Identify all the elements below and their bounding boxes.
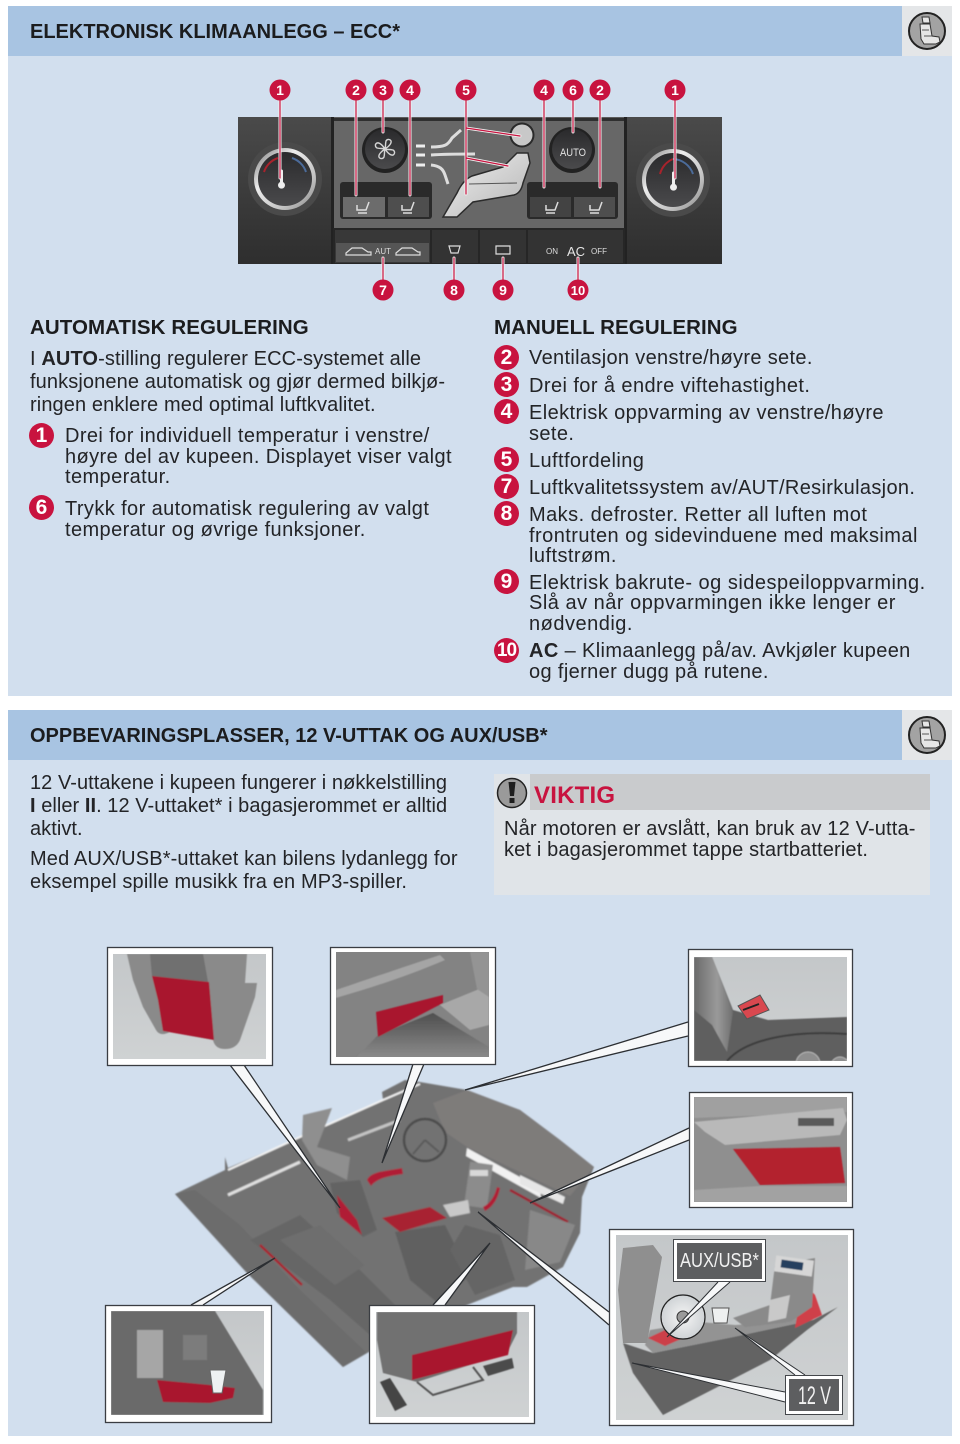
- number badges on control panel: 5: [462, 82, 470, 98]
- badge 6: 6: [36, 496, 47, 519]
- label: 12 V: [786, 1376, 842, 1414]
- text: 12 V outlets: 12 V-uttakene i kupeen fungerer i nøkkelstilling: [30, 772, 447, 794]
- number badges on control panel: 6: [569, 82, 577, 98]
- text: item 1: Drei for individuell temperatur i venstre/: [65, 425, 430, 447]
- warning heading: VIKTIG: [534, 782, 615, 809]
- seat buttons right: [527, 182, 618, 219]
- badge 4: [494, 399, 519, 424]
- text: item 9: nødvendig.: [529, 613, 633, 635]
- temperature knob right: [636, 143, 710, 217]
- badge 7: [494, 474, 519, 499]
- text: item 10: og fjerner dugg på rutene.: [529, 660, 769, 682]
- inset: seat cushion storage: [370, 1306, 534, 1424]
- text: item 4: sete.: [529, 422, 574, 444]
- text: automatic intro: ringen enklere med optimal luftkvalitet.: [30, 394, 376, 416]
- text: item 5: Luftfordeling: [529, 450, 644, 472]
- label: AUX/USB: AUX/USB*: [680, 1250, 759, 1272]
- icon: seat, climate header: [909, 13, 945, 49]
- label: 12 V: 12 V: [798, 1382, 831, 1410]
- text: item 6: temperatur og øvrige funksjoner.: [65, 518, 366, 540]
- badge 10: [494, 638, 519, 663]
- header bar: climate: [8, 6, 902, 56]
- text: 12 V outlets: I eller II. 12 V-uttaket* i bagasjerommet er alltid: [30, 795, 447, 817]
- text: item 1: temperatur.: [65, 466, 171, 488]
- warning box: [494, 774, 930, 895]
- badge 4: 4: [501, 400, 512, 423]
- badge 1: 1: [36, 424, 47, 447]
- armrest lid: [618, 1245, 662, 1343]
- number badges on control panel: [270, 80, 686, 300]
- text: item 7: Luftkvalitetssystem av/AUT/Resirkulasjon.: [529, 477, 915, 499]
- cup: [712, 1308, 729, 1323]
- text: AUX/USB: Med AUX/USB*-uttaket kan bilens lydanlegg for: [30, 848, 458, 870]
- label: AUX/USB: [674, 1240, 766, 1282]
- text: item 8: Maks. defroster. Retter all luften mot: [529, 504, 867, 526]
- inset: glove compartment: [690, 1092, 852, 1208]
- seat buttons left: [340, 182, 432, 219]
- text: 12 V outlets: aktivt.: [30, 818, 83, 840]
- text: item 8: [529, 504, 918, 567]
- inset: centre console with AUX/USB and 12 V: [610, 1230, 854, 1426]
- title: climate: ELEKTRONISK KLIMAANLEGG – ECC*: [30, 21, 400, 43]
- inset: seat back pocket: [108, 948, 272, 1066]
- badge 3: 3: [501, 373, 512, 396]
- panel: storage and outlets: [8, 710, 952, 1436]
- icon: exclamation: [498, 778, 526, 808]
- number badges on control panel: 2: [596, 82, 604, 98]
- fan knob: [362, 127, 408, 173]
- text: item 10: AC – Klimaanlegg på/av. Avkjøler kupeen: [529, 640, 911, 662]
- text: item 6: Trykk for automatisk regulering av valgt: [65, 498, 429, 520]
- text: warning: ket i bagasjerommet tappe startbatteriet.: [504, 838, 868, 860]
- text: automatic intro: [30, 348, 445, 416]
- badge 6: [29, 495, 54, 520]
- text: AUX/USB: eksempel spille musikk fra en MP3-spiller.: [30, 871, 407, 893]
- bottom row buttons: AC: [567, 244, 585, 259]
- badge 7: 7: [501, 475, 512, 498]
- air distribution graphic: [416, 122, 534, 217]
- number badges on control panel: 1: [276, 82, 284, 98]
- number badges on control panel: 3: [379, 82, 387, 98]
- bottom row buttons: AUT: [375, 247, 391, 256]
- text: AUX/USB: [30, 848, 458, 893]
- text: item 4: [529, 402, 884, 444]
- text: item 4: Elektrisk oppvarming av venstre/høyre: [529, 402, 884, 424]
- number badges on control panel: 10: [571, 283, 585, 298]
- text: item 9: Slå av når oppvarmingen ikke lenger er: [529, 592, 896, 614]
- badge 2: [494, 345, 519, 370]
- callout leader lines: [280, 90, 675, 290]
- text: item 6: [65, 498, 429, 540]
- badge 2: 2: [501, 346, 512, 369]
- inset: rear armrest: [106, 1306, 272, 1422]
- badge 8: [494, 501, 519, 526]
- icon: seat, storage header: [909, 717, 945, 753]
- heading: manual: MANUELL REGULERING: [494, 316, 738, 339]
- text: automatic intro: funksjonene automatisk og gjør dermed bilkjø-: [30, 371, 445, 393]
- text: 12 V outlets: [30, 772, 447, 840]
- number badges on control panel: 1: [671, 82, 679, 98]
- text: warning: Når motoren er avslått, kan bruk av 12 V-utta-: [504, 818, 916, 840]
- temperature knob left: [248, 142, 322, 216]
- number badges on control panel: 9: [499, 282, 507, 298]
- badge 5: 5: [501, 448, 512, 471]
- text: item 9: [529, 572, 926, 635]
- panel: climate system: [8, 6, 952, 696]
- text: item 2: Ventilasjon venstre/høyre sete.: [529, 347, 813, 369]
- text: automatic intro: I AUTO-stilling regulerer ECC-systemet alle: [30, 348, 421, 370]
- number badges on control panel: 4: [406, 82, 414, 98]
- header bar: storage: [8, 710, 902, 760]
- callout wedges to car: [191, 1022, 689, 1325]
- console body: [623, 1255, 838, 1415]
- text: item 8: luftstrøm.: [529, 545, 617, 567]
- AUTO knob: [549, 127, 595, 173]
- text: item 8: frontruten og sidevinduene med maksimal: [529, 524, 918, 546]
- heading: automatic: AUTOMATISK REGULERING: [30, 316, 309, 339]
- text: item 9: Elektrisk bakrute- og sidespeiloppvarming.: [529, 572, 926, 594]
- control panel illustration: [238, 80, 722, 300]
- header icon box: climate: [902, 6, 952, 56]
- text: item 1: høyre del av kupeen. Displayet viser valgt: [65, 446, 452, 468]
- title: storage: OPPBEVARINGSPLASSER, 12 V-UTTAK OG AUX/USB*: [30, 725, 548, 747]
- badge 5: [494, 447, 519, 472]
- number badges on control panel: 2: [352, 82, 360, 98]
- badge 9: [494, 569, 519, 594]
- text: item 3: Drei for å endre viftehastighet.: [529, 375, 810, 397]
- number badges on control panel: 4: [540, 82, 548, 98]
- text: warning: [504, 818, 916, 860]
- text: item 1: [65, 425, 452, 488]
- bottom row buttons: [335, 230, 623, 263]
- AUTO knob: AUTO: [560, 147, 586, 159]
- bottom row buttons: OFF: [591, 247, 607, 256]
- number badges on control panel: 8: [450, 282, 458, 298]
- inset: door pocket: [330, 948, 496, 1064]
- bottom row buttons: ON: [546, 247, 558, 256]
- car interior illustration: [175, 1080, 594, 1367]
- header icon box: storage: [902, 710, 952, 760]
- badge 9: 9: [501, 570, 512, 593]
- badge 3: [494, 372, 519, 397]
- inset: dashboard ticket clip: [688, 950, 852, 1076]
- badge 1: [29, 423, 54, 448]
- badge 8: 8: [501, 502, 512, 525]
- number badges on control panel: 7: [379, 282, 387, 298]
- text: item 10: [529, 640, 911, 682]
- console callouts: [632, 1282, 805, 1402]
- CD disc: [661, 1295, 705, 1339]
- badge 10: 10: [497, 640, 516, 661]
